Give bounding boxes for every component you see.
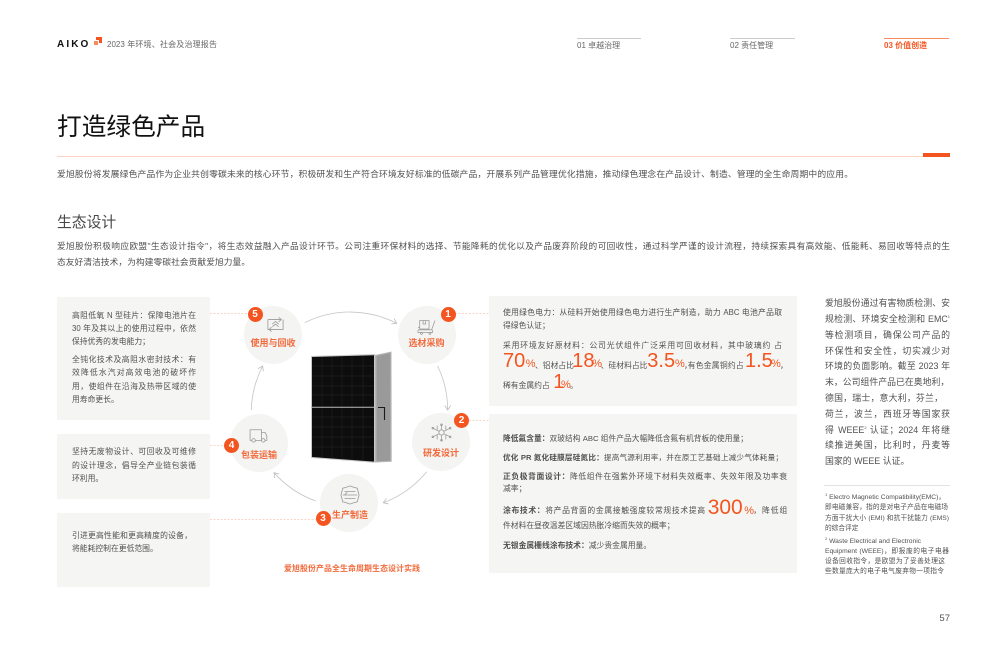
- panel: packaging and transport: 坚持无废物设计、可回收及可维修: [72, 447, 196, 456]
- panel: material sourcing details: 、硅材料占比: [601, 360, 647, 370]
- badge 5: [248, 306, 262, 322]
- footnotes: [824, 485, 950, 575]
- panel: use and recycle: 效降低水汽对高效电池的破坏作: [72, 368, 196, 377]
- side text: certification: 环境的负面影响。截至 2023 年: [825, 361, 950, 371]
- stat: 18% aluminium: 18: [572, 350, 595, 372]
- panel: use and recycle: 用，使组件在沿海及热带区域的使: [72, 382, 196, 391]
- footnote 2: 些数量庞大的电子电气废弃物一项指令: [825, 568, 944, 575]
- side text: certification: 德国，瑞士，意大利，芬兰，: [825, 393, 943, 403]
- panel: material sourcing details: ，: [684, 360, 692, 370]
- panel: R&D design details: 降低氟含量：双玻结构 ABC 组件产品大幅降低含氟有机背板的使用量；: [503, 434, 748, 443]
- panel: material sourcing details: 采用环境友好原材料：公司光伏组件广泛采用可回收材料，其中玻璃约 占: [503, 340, 782, 350]
- panel: R&D design details: 涂布技术：将产品背面的金属接触强度较常规技术提高: [503, 506, 705, 515]
- side text: certification: [825, 298, 950, 466]
- panel: R&D design details: 减率；: [503, 484, 526, 493]
- icon: circuit: [432, 424, 452, 442]
- panel: use and recycle: 高阻低氧 N 型硅片：保障电池片在: [72, 311, 196, 320]
- panel: R&D design details: 优化 PR 氮化硅膜层硅氮比：提高气源利用率，并在原工艺基础上减少气体耗量；: [503, 453, 783, 462]
- badge 4: 4: [229, 440, 234, 450]
- badge 3: 3: [320, 512, 326, 524]
- panel: material sourcing details: 得绿色认证；: [503, 320, 550, 330]
- section paragraph: [57, 241, 950, 267]
- intro text: 爱旭股份将发展绿色产品作为企业共创零碳未来的核心环节，积极研发和生产符合环境友好标准的低碳产品，开展系列产品管理优化措施，推动绿色理念在产品设计、制造、管理的全生命周期中的应用。: [57, 168, 853, 178]
- footnote 1: 1 Electro Magnetic Compatibility(EMC)，: [825, 492, 945, 501]
- footnote 1: 即电磁兼容，指的是对电子产品在电磁场: [825, 504, 948, 511]
- badge 4: [224, 438, 239, 452]
- stat: 1.5% copper: %: [771, 358, 781, 370]
- icon: sourcing cart: [418, 320, 436, 335]
- panel: R&D design details: [489, 414, 797, 573]
- stat: 1% rare metals: [553, 371, 571, 393]
- nav: 01: 01 卓越治理: [577, 41, 620, 50]
- panel: material sourcing details: 使用绿色电力：从硅料开始使用绿色电力进行生产制造，助力 ABC 电池产品取: [503, 308, 782, 317]
- badge 2: [454, 413, 469, 428]
- footnote 2: 2 Waste Electrical and Electronic: [825, 536, 921, 545]
- panel: use and recycle: 用寿命更长。: [72, 395, 119, 404]
- panel: material sourcing details: [489, 296, 797, 406]
- panel: material sourcing details: 稀有金属约占: [503, 380, 550, 390]
- side text: certification: 等检测项目，确保公司产品的: [825, 330, 950, 340]
- label: 包装运输: 包装运输: [241, 450, 277, 460]
- panel: packaging and transport: 的设计理念，倡导全产业链包装循: [72, 461, 196, 470]
- panel: packaging and transport: [57, 434, 210, 499]
- side text: certification: 爱旭股份通过有害物质检测、安: [825, 298, 950, 308]
- stat: 300%: 300: [708, 496, 743, 519]
- label: 选材采购: 选材采购: [408, 338, 444, 348]
- panel: R&D design details: 无银金属栅线涂布技术：减少贵金属用量。: [503, 541, 651, 550]
- stat: 18% aluminium: %: [592, 358, 602, 370]
- badge 2: 2: [459, 415, 464, 426]
- section paragraph: 爱旭股份积极响应欧盟"生态设计指令"，将生态效益融入产品设计环节。公司注重环保材料的选择、节能降耗的优化以及产品废弃阶段的可回收性，通过科学严谨的设计流程，持续探索具有高效能、低能耗、易回收等特点的生: [57, 241, 950, 251]
- node 1: material sourcing: [398, 306, 456, 364]
- stat: 3.5% silicon: %: [675, 358, 685, 370]
- label: 生产制造: 生产制造: [332, 510, 368, 520]
- stat: 70% glass: 70: [503, 350, 525, 372]
- badge 1: 1: [445, 308, 451, 320]
- panel: use and recycle: [57, 297, 210, 420]
- icon: recycling frame: [268, 317, 284, 332]
- side text: certification: 国家的 WEEE 认证。: [825, 456, 909, 466]
- stat: 70% glass: %: [526, 358, 535, 370]
- label: 研发设计: 研发设计: [423, 448, 459, 458]
- section heading: 生态设计: [57, 215, 116, 231]
- footnote 2: 设备回收指令，是欧盟为了妥善处理这: [825, 558, 945, 565]
- panel: material sourcing details: 、铝材占比: [535, 360, 574, 370]
- panel: material sourcing details: 。: [570, 380, 578, 390]
- panel: material sourcing details: 有色金属铜约占: [688, 360, 744, 370]
- node 3: manufacturing: [316, 474, 378, 532]
- stat: 1.5% copper: 1.5: [745, 350, 773, 372]
- panel: use and recycle: 30 年及其以上的使用过程中，依然: [72, 324, 196, 333]
- stat: 70% glass: [503, 350, 536, 372]
- badge 1: [440, 306, 456, 322]
- header: logo: [57, 37, 102, 50]
- icon: wafer: [340, 486, 360, 504]
- stat: 1% rare metals: %: [561, 379, 571, 391]
- stat: 1% rare metals: 1: [553, 371, 564, 393]
- side text: certification: 末，公司组件产品已在奥地利，: [825, 377, 949, 387]
- panel: use and recycle: 全钝化技术及高阻水密封技术：有: [72, 355, 196, 364]
- nav: 02: 02 责任管理: [730, 41, 773, 50]
- panel: packaging and transport: 环利用。: [72, 474, 103, 483]
- panel: manufacturing: [57, 513, 210, 587]
- node 5: use and recycling: [244, 306, 302, 364]
- panel: material sourcing details: ，: [780, 360, 788, 370]
- side text: certification: 得 WEEE2 认证；2024 年将继: [825, 425, 950, 435]
- side text: certification: 续推进美国，比利时，丹麦等: [825, 440, 950, 450]
- footnote 1: 方面干扰大小 (EMI) 和抗干扰能力 (EMS): [825, 514, 949, 522]
- badge 3: [316, 510, 330, 526]
- footnote 1: [825, 492, 949, 532]
- panel: R&D design details: ，降低组: [753, 506, 787, 515]
- side text: certification: 环保性和安全性，切实减少对: [825, 346, 950, 356]
- diagram caption: 爱旭股份产品全生命周期生态设计实践: [284, 564, 420, 573]
- icon: truck: [250, 429, 268, 442]
- side text: certification: 荷兰，波兰，西班牙等国家获: [825, 409, 950, 419]
- stat: 3.5% silicon: 3.5: [647, 350, 675, 372]
- footnote 1: 的综合评定: [825, 524, 858, 532]
- page number: 57: [939, 613, 950, 624]
- panel: manufacturing: 引进更高性能和更高精度的设备，: [72, 531, 192, 540]
- panel: R&D design details: 正负极背面设计：降低组件在强紫外环境下材料失效概率、失效年限及功率衰: [503, 472, 787, 481]
- footnote 2: Equipment (WEEE)，即报废的电子电器: [825, 548, 949, 555]
- footnote 2: [825, 536, 949, 575]
- section paragraph: 态友好清洁技术，为构建零碳社会贡献爱旭力量。: [57, 257, 250, 267]
- node 4: packaging and transport: [224, 414, 288, 472]
- node 2: R&D design: [412, 413, 470, 471]
- title rule: [57, 153, 950, 157]
- image: solar panel: [311, 352, 392, 463]
- stat: 300%: %: [744, 505, 754, 517]
- panel: R&D design details: 件材料在昼夜温差区域因热胀冷缩而失效的概率；: [503, 521, 675, 530]
- header: report title: 2023 年环境、社会及治理报告: [107, 40, 217, 49]
- side text: certification: 规检测、环境安全检测和 EMC1: [825, 314, 950, 324]
- header: logo: AIKO: [57, 38, 90, 50]
- badge 5: 5: [252, 308, 258, 320]
- panel: manufacturing: 将能耗控制在更低范围。: [72, 544, 158, 553]
- title: 打造绿色产品: [57, 114, 205, 141]
- label: 使用与回收: 使用与回收: [250, 338, 296, 348]
- panel: use and recycle: 保持优秀的发电能力；: [72, 337, 150, 346]
- nav: 03 active: 03 价值创造: [884, 41, 927, 50]
